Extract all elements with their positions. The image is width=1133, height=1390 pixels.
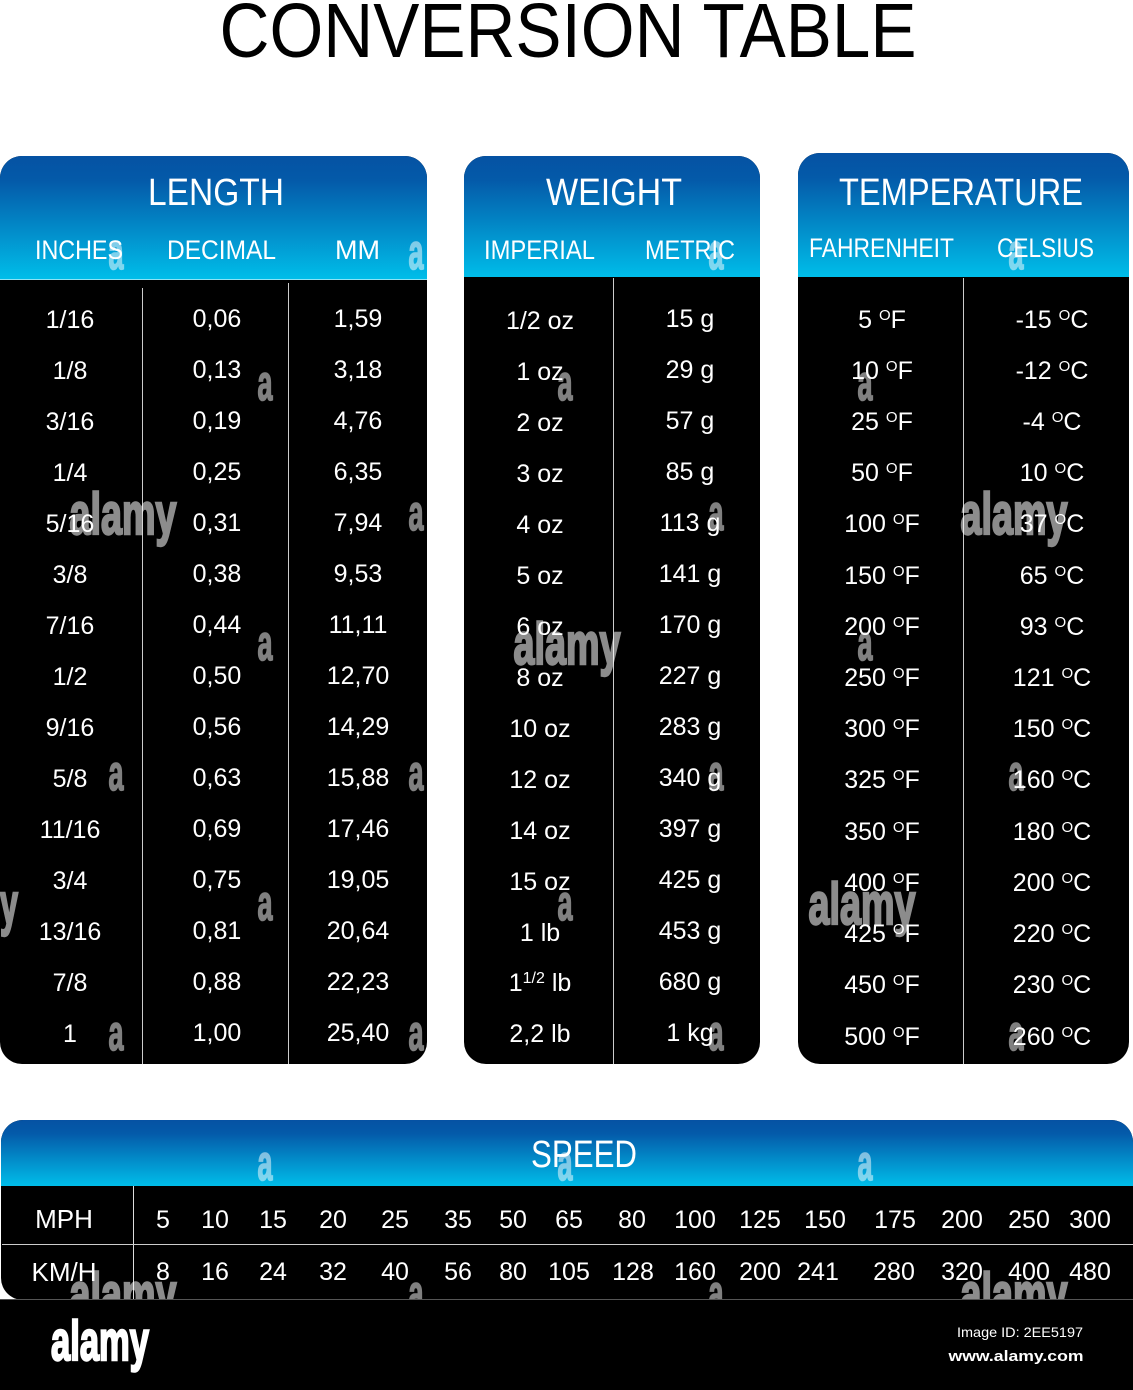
length column: decimal: 0,06: [193, 305, 241, 333]
speed row: mph: 80: [618, 1206, 646, 1234]
speed heading: SPEED: [531, 1134, 637, 1176]
speed row: km/h: 8: [156, 1258, 170, 1286]
temperature column: fahrenheit: O: [893, 1024, 905, 1041]
length column: inches: 1/4: [53, 459, 87, 487]
temperature column: fahrenheit: 100: [844, 510, 886, 538]
weight column: imperial: 1 oz: [516, 358, 564, 386]
panel: temperature: [798, 153, 1129, 1064]
watermark overlay: a: [858, 1135, 873, 1191]
weight column headers: [484, 235, 735, 265]
speed row: km/h: 280: [873, 1258, 915, 1286]
weight column: imperial: [506, 307, 574, 1048]
length column: decimal: 0,81: [193, 917, 241, 945]
speed row: km/h: 105: [548, 1258, 590, 1286]
length column: mm: 9,53: [334, 560, 382, 588]
temperature column: celsius: 180: [1013, 818, 1055, 846]
weight column: metric: [659, 305, 721, 1047]
panel: speed: [1, 1120, 1133, 1300]
length column: mm: 25,40: [327, 1019, 389, 1047]
speed row: km/h: 128: [612, 1258, 654, 1286]
temperature column: fahrenheit: 300: [844, 715, 886, 743]
temperature column: fahrenheit: O: [893, 716, 905, 733]
temperature column: fahrenheit: F: [905, 920, 920, 948]
watermark overlay: a: [1008, 745, 1024, 801]
speed row: km/h: [32, 1257, 1111, 1287]
length column: mm: 17,46: [327, 815, 389, 843]
temperature column: celsius: -15: [1016, 306, 1052, 334]
length column: inches: 13/16: [39, 918, 101, 946]
temperature column: fahrenheit: 325: [844, 766, 886, 794]
length column: decimal: [193, 305, 241, 1047]
temperature column: celsius: 150: [1013, 715, 1055, 743]
watermark overlay: a: [708, 1265, 724, 1321]
length column: inches: 7/8: [53, 969, 87, 997]
weight column: metric: 397 g: [659, 815, 721, 843]
speed row: km/h: 400: [1008, 1258, 1050, 1286]
speed row: km/h: 32: [319, 1258, 347, 1286]
watermark overlay: a: [108, 745, 124, 801]
length column: decimal: 0,56: [193, 713, 241, 741]
length column: inches: 7/16: [46, 612, 94, 640]
temperature column: fahrenheit: 400: [844, 869, 886, 897]
temperature column: fahrenheit: O: [893, 972, 905, 989]
temperature column: fahrenheit: O: [886, 358, 898, 375]
speed row: mph: 65: [555, 1206, 583, 1234]
weight column headers: METRIC: [645, 235, 735, 265]
weight column: metric: 170 g: [659, 611, 721, 639]
weight column: imperial: 1/2 oz: [506, 307, 574, 335]
temperature column: celsius: O: [1059, 358, 1070, 375]
length column: mm: 1,59: [334, 305, 382, 333]
temperature column: fahrenheit: 425: [844, 920, 886, 948]
temperature column: celsius: O: [1061, 972, 1073, 989]
temperature column: celsius: C: [1066, 510, 1084, 538]
temperature column: celsius: O: [1055, 511, 1066, 528]
speed row: km/h: 80: [499, 1258, 527, 1286]
length column: inches: 1: [63, 1020, 77, 1048]
weight column: imperial: 10 oz: [509, 715, 571, 743]
temperature column: fahrenheit: O: [886, 409, 898, 426]
watermark overlay: [0, 224, 1068, 1327]
length column: inches: 9/16: [46, 714, 94, 742]
temperature column: celsius: C: [1073, 766, 1091, 794]
length column: decimal: 0,69: [193, 815, 241, 843]
length column: decimal: 0,44: [193, 611, 241, 639]
weight column: metric: 29 g: [666, 356, 714, 384]
temperature column: fahrenheit: O: [879, 307, 891, 324]
temperature column: celsius: O: [1061, 767, 1073, 784]
length column: mm: 3,18: [334, 356, 382, 384]
temperature column: celsius: 10: [1020, 459, 1048, 487]
temperature column: celsius: C: [1070, 306, 1088, 334]
speed row: km/h: 16: [201, 1258, 229, 1286]
watermark overlay: alamy: [960, 482, 1068, 547]
weight header band: [464, 156, 760, 277]
temperature column: fahrenheit: O: [893, 870, 905, 887]
temperature column: fahrenheit: F: [905, 715, 920, 743]
temperature column: celsius: [1013, 306, 1091, 1051]
length column: mm: 22,23: [327, 968, 389, 996]
length column: decimal: 1,00: [193, 1019, 241, 1047]
speed row: mph: MPH: [35, 1204, 93, 1234]
temperature column: fahrenheit: F: [891, 306, 906, 334]
temperature column: fahrenheit: 500: [844, 1023, 886, 1051]
length column: mm: 14,29: [327, 713, 389, 741]
weight column: metric: 141 g: [659, 560, 721, 588]
speed row: km/h: 56: [444, 1258, 472, 1286]
weight column: metric: 340 g: [659, 764, 721, 792]
temperature column: fahrenheit: O: [893, 819, 905, 836]
length column: mm: [327, 305, 389, 1047]
speed row: km/h: 24: [259, 1258, 287, 1286]
temperature column: fahrenheit: 5: [858, 306, 872, 334]
temperature column: fahrenheit: O: [893, 511, 905, 528]
temperature column: celsius: C: [1073, 715, 1091, 743]
watermark overlay: a: [258, 355, 273, 411]
speed row: mph: 200: [941, 1206, 983, 1234]
length column: inches: [39, 306, 101, 1048]
length column: inches: 3/4: [53, 867, 87, 895]
weight column: metric: 453 g: [659, 917, 721, 945]
length column: decimal: 0,19: [193, 407, 241, 435]
length column: mm: 15,88: [327, 764, 389, 792]
watermark overlay: a: [108, 224, 124, 280]
length column: decimal: 0,63: [193, 764, 241, 792]
weight column: metric: 425 g: [659, 866, 721, 894]
weight column headers: IMPERIAL: [484, 235, 595, 265]
speed header band: [1, 1120, 1133, 1186]
watermark overlay: a: [408, 485, 424, 541]
length column: decimal: 0,38: [193, 560, 241, 588]
speed row: mph: 10: [201, 1206, 229, 1234]
temperature column: celsius: 37: [1020, 510, 1048, 538]
temperature column: fahrenheit: O: [893, 921, 905, 938]
speed row: mph: 300: [1069, 1206, 1111, 1234]
weight heading: WEIGHT: [546, 172, 682, 214]
length column: decimal: 0,50: [193, 662, 241, 690]
temperature column: fahrenheit: O: [893, 563, 905, 580]
weight column: imperial: 1/2: [523, 970, 545, 987]
weight column: imperial: 2 oz: [516, 409, 564, 437]
length column: mm: 12,70: [327, 662, 389, 690]
watermark overlay: a: [1008, 224, 1024, 280]
length column: inches: 1/8: [53, 357, 87, 385]
temperature column: fahrenheit: O: [893, 614, 905, 631]
temperature column: fahrenheit: F: [905, 766, 920, 794]
weight column: metric: 113 g: [660, 509, 720, 537]
temperature column: fahrenheit: 150: [844, 562, 886, 590]
temperature column: celsius: C: [1063, 408, 1081, 436]
image id: Image ID: 2EE5197: [957, 1324, 1083, 1340]
watermark overlay: a: [708, 1005, 724, 1061]
weight column: metric: 57 g: [666, 407, 714, 435]
length column: decimal: 0,75: [193, 866, 241, 894]
temperature column: celsius: -4: [1023, 408, 1045, 436]
speed row: mph: 20: [319, 1206, 347, 1234]
panel: weight: [464, 156, 760, 1064]
weight column: imperial: 6 oz: [516, 613, 564, 641]
temperature column: fahrenheit: 250: [844, 664, 886, 692]
temperature column: celsius: 200: [1013, 869, 1055, 897]
length column: inches: 5/16: [46, 510, 94, 538]
length column: decimal: 0,25: [193, 458, 241, 486]
temperature column: fahrenheit: F: [905, 664, 920, 692]
speed row: km/h: 241: [797, 1258, 839, 1286]
temperature column: fahrenheit: 25: [851, 408, 879, 436]
length heading: LENGTH: [148, 172, 284, 214]
speed row: km/h: KM/H: [32, 1257, 96, 1287]
temperature column: celsius: 230: [1013, 971, 1055, 999]
speed row: mph: 100: [674, 1206, 716, 1234]
temperature column: fahrenheit: F: [905, 613, 920, 641]
speed row: mph: 175: [874, 1206, 916, 1234]
footer logo: alamy: [51, 1309, 149, 1372]
panel: length: [0, 156, 427, 1064]
temperature column: fahrenheit: [844, 306, 920, 1051]
weight column: imperial: 15 oz: [509, 868, 571, 896]
weight column: imperial: 1: [509, 969, 523, 997]
temperature column: fahrenheit: 350: [844, 818, 886, 846]
weight column: imperial: 8 oz: [516, 664, 564, 692]
speed row: mph: 50: [499, 1206, 527, 1234]
watermark overlay: a: [408, 224, 424, 280]
watermark overlay: a: [558, 875, 573, 931]
length column headers: INCHES: [35, 235, 123, 265]
temperature column headers: FAHRENHEIT: [809, 233, 954, 263]
length column: inches: 1/2: [53, 663, 87, 691]
weight column: imperial: 3 oz: [516, 460, 564, 488]
length column: inches: 5/8: [53, 765, 87, 793]
length header band: [0, 156, 427, 279]
length column: decimal: 0,13: [193, 356, 241, 384]
weight column: metric: 1 kg: [666, 1019, 714, 1047]
temperature column: celsius: C: [1070, 357, 1088, 385]
speed row: km/h: 160: [674, 1258, 716, 1286]
speed row: mph: 25: [381, 1206, 409, 1234]
temperature column headers: CELSIUS: [997, 233, 1094, 263]
watermark overlay: alamy: [70, 1262, 176, 1327]
length column: inches: 3/8: [53, 561, 87, 589]
temperature column: fahrenheit: F: [905, 510, 920, 538]
watermark overlay: a: [408, 1265, 424, 1321]
watermark overlay: a: [858, 615, 873, 671]
temperature column headers: [809, 233, 1094, 263]
temperature column: celsius: C: [1066, 613, 1084, 641]
temperature column: fahrenheit: F: [905, 1023, 920, 1051]
temperature column: fahrenheit: F: [898, 408, 913, 436]
watermark overlay: a: [708, 224, 724, 280]
temperature column: fahrenheit: F: [898, 357, 913, 385]
temperature column: celsius: C: [1073, 1023, 1091, 1051]
temperature column: celsius: 65: [1020, 562, 1048, 590]
weight column: imperial: 2,2 lb: [509, 1020, 571, 1048]
temperature column: fahrenheit: F: [905, 818, 920, 846]
watermark overlay: alamy: [808, 872, 916, 937]
temperature column: celsius: O: [1052, 409, 1063, 426]
temperature column: celsius: C: [1073, 971, 1091, 999]
temperature column: fahrenheit: 50: [851, 459, 879, 487]
temperature column: celsius: O: [1061, 665, 1073, 682]
speed row: mph: 250: [1008, 1206, 1050, 1234]
temperature column: celsius: O: [1061, 870, 1073, 887]
length column: mm: 19,05: [327, 866, 389, 894]
temperature column: celsius: 220: [1013, 920, 1055, 948]
temperature column: fahrenheit: O: [886, 460, 898, 477]
temperature column: fahrenheit: O: [893, 767, 905, 784]
temperature column: fahrenheit: F: [898, 459, 913, 487]
length column: decimal: 0,31: [193, 509, 241, 537]
watermark overlay: a: [258, 615, 273, 671]
temperature column: celsius: O: [1055, 563, 1066, 580]
watermark overlay: a: [558, 1135, 573, 1191]
speed row: km/h: 320: [941, 1258, 983, 1286]
speed row: km/h: 200: [739, 1258, 781, 1286]
weight column: imperial: 4 oz: [516, 511, 564, 539]
watermark overlay: alamy: [70, 482, 176, 547]
length column: mm: 20,64: [327, 917, 389, 945]
temperature column: celsius: O: [1055, 460, 1066, 477]
speed row: km/h: 480: [1069, 1258, 1111, 1286]
length column: inches: 11/16: [40, 816, 100, 844]
weight column: imperial: lb: [545, 969, 571, 997]
weight column: metric: 15 g: [666, 305, 714, 333]
temperature column: fahrenheit: O: [893, 665, 905, 682]
footer bar: [0, 1299, 1133, 1390]
temperature column: celsius: O: [1061, 1024, 1073, 1041]
watermark overlay: a: [258, 1135, 273, 1191]
watermark overlay: a: [1008, 1005, 1024, 1061]
speed row: mph: 5: [156, 1206, 170, 1234]
temperature column: celsius: C: [1073, 869, 1091, 897]
watermark overlay: a: [858, 355, 873, 411]
weight column: imperial: 14 oz: [509, 817, 571, 845]
length column: inches: 1/16: [46, 306, 94, 334]
watermark overlay: y: [0, 872, 18, 937]
watermark overlay: a: [708, 745, 724, 801]
temperature column: fahrenheit: 200: [844, 613, 886, 641]
speed row: mph: 150: [804, 1206, 846, 1234]
watermark overlay: a: [258, 875, 273, 931]
speed row: mph: 125: [739, 1206, 781, 1234]
weight column: metric: 680 g: [659, 968, 721, 996]
length column headers: DECIMAL: [167, 235, 276, 265]
length column: mm: 7,94: [334, 509, 382, 537]
speed row: mph: 35: [444, 1206, 472, 1234]
website: www.alamy.com: [947, 1348, 1084, 1365]
weight column: imperial: 12 oz: [509, 766, 571, 794]
watermark overlay: a: [408, 745, 424, 801]
length column: decimal: 0,88: [193, 968, 241, 996]
temperature column: celsius: 260: [1013, 1023, 1055, 1051]
temperature column: celsius: O: [1061, 819, 1073, 836]
weight column: imperial: 1 lb: [520, 919, 560, 947]
watermark overlay: alamy: [514, 612, 620, 677]
temperature header band: [798, 153, 1129, 277]
temperature column: celsius: O: [1061, 716, 1073, 733]
temperature heading: TEMPERATURE: [839, 172, 1083, 214]
length column: mm: 6,35: [334, 458, 382, 486]
length column headers: [35, 235, 380, 265]
temperature column: celsius: O: [1055, 614, 1066, 631]
watermark overlay: a: [558, 355, 573, 411]
length column headers: MM: [335, 235, 380, 265]
temperature column: celsius: C: [1066, 562, 1084, 590]
temperature column: fahrenheit: 10: [851, 357, 879, 385]
temperature column: fahrenheit: F: [905, 971, 920, 999]
temperature column: celsius: O: [1061, 921, 1073, 938]
speed row: mph: 15: [259, 1206, 287, 1234]
weight column: metric: 85 g: [666, 458, 714, 486]
weight column: metric: 227 g: [659, 662, 721, 690]
temperature column: celsius: C: [1066, 459, 1084, 487]
weight column: imperial: 5 oz: [516, 562, 564, 590]
temperature column: celsius: 121: [1013, 664, 1055, 692]
temperature column: fahrenheit: F: [905, 869, 920, 897]
temperature column: celsius: C: [1073, 664, 1091, 692]
temperature column: celsius: 93: [1020, 613, 1048, 641]
speed row: km/h: 40: [381, 1258, 409, 1286]
watermark overlay: alamy: [960, 1262, 1068, 1327]
length column: inches: 3/16: [46, 408, 94, 436]
watermark overlay: a: [708, 485, 724, 541]
watermark overlay: a: [108, 1005, 124, 1061]
length column: mm: 4,76: [334, 407, 382, 435]
watermark overlay: a: [408, 1005, 424, 1061]
temperature column: celsius: O: [1059, 307, 1070, 324]
temperature column: celsius: -12: [1016, 357, 1052, 385]
temperature column: celsius: C: [1073, 920, 1091, 948]
speed row: mph: [35, 1204, 1111, 1234]
temperature column: celsius: 160: [1013, 766, 1055, 794]
temperature column: fahrenheit: F: [905, 562, 920, 590]
weight column: metric: 283 g: [659, 713, 721, 741]
temperature column: celsius: C: [1073, 818, 1091, 846]
length column: mm: 11,11: [329, 611, 387, 639]
temperature column: fahrenheit: 450: [844, 971, 886, 999]
